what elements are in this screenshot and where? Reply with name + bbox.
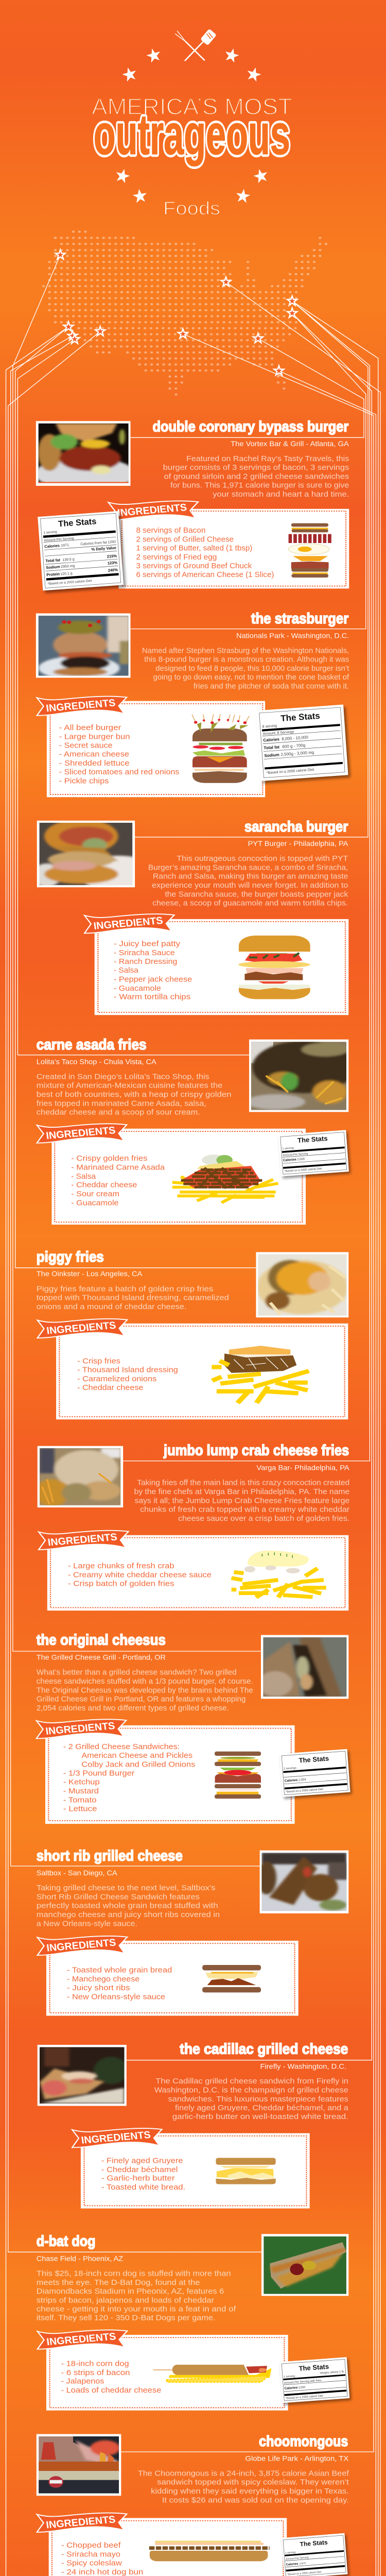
nutrition stats card: Calories (284, 1778, 298, 1783)
description: The Choomongous is a 24-inch, 3,875 calorie Asian Beef (138, 2469, 349, 2478)
description: your stomach and heart a hard time. (213, 490, 349, 499)
panel: ingredients: - Warm tortilla chips (114, 993, 190, 1001)
nutrition stats card: *Based on a 2000 calorie Diet (286, 2395, 323, 2400)
panel: ingredients: - Shredded lettuce (59, 759, 130, 767)
description: for buns. This 1,971 calorie burger is sure to give (170, 481, 349, 489)
description: It costs $26 and was sold out on the opening day. (162, 2496, 349, 2504)
nutrition stats card: 139.5 g (62, 557, 75, 562)
panel: ingredients: - Large burger bun (59, 732, 130, 741)
banner: ingredients: INGREDIENTS (46, 1319, 117, 1336)
panel: ingredients: - Toasted white bread. (101, 2183, 185, 2192)
description: sandwiches. This luxurious masterpiece features (168, 2095, 348, 2103)
description: Ranch and Salsa, making this burger an amazing taste (153, 872, 348, 880)
description (163, 454, 349, 499)
panel: ingredients: - Ketchup (63, 1778, 100, 1786)
illustration: layered burger (289, 523, 332, 578)
panel: ingredients: - Sriracha Sauce (114, 948, 175, 957)
venue: Lolita’s Taco Shop - Chula Vista, CA (37, 1058, 156, 1066)
panel: ingredients (119, 509, 349, 588)
panel: ingredients: - 1/3 Pound Burger (63, 1769, 135, 1777)
dotted map of the United States (44, 232, 326, 395)
description (142, 646, 349, 690)
description: the Sarancha sauce, the burger boasts pepper jack (165, 890, 348, 899)
banner: ingredients: INGREDIENTS (117, 502, 187, 518)
illustration: choomongous sandwich (149, 2540, 270, 2561)
description: garlic-herb butter on well-toasted white bread. (172, 2112, 348, 2121)
icon: crossed fork and spatula (175, 29, 216, 60)
nutrition stats card: Calories (44, 543, 60, 549)
panel: ingredients: - Lettuce (63, 1804, 97, 1813)
venue: Firefly - Washington, D.C. (260, 2063, 346, 2071)
title: outrageous (94, 103, 290, 166)
description: cheese - getting it into your mouth is a feat in and of (37, 2305, 236, 2313)
description: What’s better than a grilled cheese sandwich? Two grilled (37, 1668, 237, 1676)
nutrition stats card (279, 1749, 352, 1799)
panel: ingredients (47, 1535, 348, 1611)
photo: the cadillac grilled cheese (38, 2045, 128, 2106)
panel: ingredients: - Guacamole (71, 1198, 119, 1207)
nutrition stats card: The Stats (300, 2538, 328, 2548)
banner: ingredients: INGREDIENTS (45, 1124, 116, 1141)
section: choomongous (37, 2433, 349, 2576)
description: strips of bacon, jalapenos and loads of cheddar (37, 2296, 215, 2304)
nutrition stats card: 240% (108, 567, 118, 573)
nutrition stats card: Amount Per Serving (283, 1153, 308, 1157)
description: 2,054 calories and two different types of grilled cheese. (37, 1704, 229, 1712)
illustration: strasburger (192, 714, 249, 783)
nutrition stats card: 1971 (61, 544, 69, 548)
description: This outrageous concoction is topped with PYT (177, 854, 348, 863)
nutrition stats card (279, 2357, 352, 2405)
section: piggy fries (37, 1248, 348, 1419)
panel: ingredients: - 6 strips of bacon (61, 2368, 130, 2377)
panel: ingredients: - Sliced tomatoes and red onions (59, 768, 179, 776)
nutrition stats card: *Based on a 2000 calorie Diet (47, 579, 92, 586)
description (154, 2077, 348, 2121)
description: Washington, D.C. is the champaign of grilled cheese (154, 2086, 348, 2094)
panel: ingredients: - 2 Grilled Cheese Sandwiches: (63, 1742, 180, 1751)
description: perfectly toasted whole grain bread stuffed with (37, 1902, 218, 1910)
heading: sarancha burger (244, 819, 348, 835)
nutrition stats card: *Based on a 2000 calorie Diet (286, 1788, 324, 1793)
panel: ingredients: - Salsa (71, 1172, 96, 1180)
nutrition stats card: Calories (263, 737, 280, 743)
panel: ingredients: - Secret sauce (59, 741, 113, 750)
section: sarancha burger (32, 819, 348, 1015)
nutrition stats card: 600 g - 700g (282, 743, 306, 749)
panel: ingredients: - Large chunks of fresh crab (68, 1562, 174, 1570)
description: meets the eye. The D-Bat Dog, found at the (37, 2278, 200, 2286)
nutrition stats card: 2,054 (298, 1778, 307, 1782)
photo: sarancha burger (32, 819, 160, 891)
nutrition stats card: The Stats (58, 517, 97, 529)
panel: ingredients (95, 919, 348, 1015)
nutrition stats card: *Based on a 2000 calorie Diet (284, 1167, 322, 1173)
heading: d-bat dog (37, 2233, 96, 2249)
illustration: short rib grilled cheese (202, 1965, 261, 1992)
nutrition stats card (282, 2533, 349, 2576)
section: jumbo lump crab cheese fries (34, 1442, 350, 1611)
nutrition stats card: 8,000 - 10,000 (282, 735, 309, 741)
description (37, 1668, 253, 1712)
panel: ingredients: - Sriracha mayo (61, 2550, 120, 2558)
description (148, 854, 348, 907)
panel: ingredients: - Mustard (63, 1787, 99, 1795)
description: finely aged Gruyere, Cheddar béchamel, and a (175, 2104, 348, 2112)
panel: ingredients: - Finely aged Gruyere (101, 2156, 183, 2165)
panel: ingredients: - Creamy white cheddar cheese sauce (68, 1570, 212, 1579)
section: the original cheesus (37, 1632, 352, 1824)
panel: ingredients: - Tomato (63, 1795, 96, 1804)
nutrition stats card: 2950 mg (61, 564, 75, 569)
venue: PYT Burger - Philadelphia, PA (248, 840, 348, 848)
nutrition stats card: The Stats (297, 1134, 328, 1144)
panel: ingredients: - Sour cream (71, 1190, 119, 1198)
description: fries topped in marinated Carne Asada, salsa, (37, 1099, 206, 1108)
photo: jumbo lump crab cheese fries (34, 1446, 123, 1507)
venue: Saltbox - San Diego, CA (37, 1870, 117, 1877)
panel: ingredients: - Marinated Carne Asada (71, 1163, 165, 1172)
panel: ingredients: - Crispy golden fries (71, 1154, 148, 1163)
nutrition stats card: The Stats (299, 1754, 329, 1765)
nutrition stats card (38, 511, 126, 593)
panel: ingredients: - Salsa (114, 966, 138, 975)
nutrition stats card: Calories (284, 2386, 298, 2391)
nutrition stats card: 8 serving (262, 724, 277, 729)
header: title block (92, 29, 292, 218)
panel: ingredients: - New Orleans-style sauce (67, 1992, 165, 2001)
description (134, 1479, 350, 1522)
panel: ingredients: - Pepper jack cheese (114, 975, 192, 984)
photo: d-bat dog (261, 2234, 348, 2296)
banner: ingredients: INGREDIENTS (46, 1937, 117, 1954)
panel: ingredients: 1 serving of Butter, salted (1 tbsp) (136, 544, 252, 552)
description (37, 1284, 229, 1311)
heading: choomongous (259, 2433, 348, 2449)
banner: ingredients: INGREDIENTS (45, 697, 116, 714)
description: fries and the pitcher of soda that come with it. (194, 682, 349, 690)
nutrition stats card: 2,500g - 3,000 mg (280, 750, 314, 757)
nutrition stats card: Sodium (264, 752, 279, 758)
description: Featured on Rachel Ray’s Tasty Travels, this (186, 454, 349, 463)
venue: The Oinkster - Los Angeles, CA (37, 1270, 143, 1278)
illustration: cadillac grilled cheese (216, 2158, 276, 2184)
nutrition stats card: Amount Per Serving (286, 2556, 309, 2561)
map location stars (56, 250, 297, 375)
illustration: d-bat corn dog (153, 2365, 272, 2382)
photo: the original cheesus (258, 1635, 348, 1699)
title: America's Most: AMERICA’S MOST (92, 94, 292, 120)
section: the strasburger (36, 611, 350, 797)
nutrition stats card: 120.1 g (60, 572, 73, 576)
nutrition stats card: Calories (286, 2563, 299, 2567)
description: says it all; the Jumbo Lump Crab Cheese Fries feature large (135, 1496, 349, 1505)
section: short rib grilled cheese (37, 1848, 348, 2016)
nutrition stats card: Amount: 8 Servings (262, 730, 294, 736)
nutrition stats card: 215% (107, 553, 117, 559)
section: double coronary bypass burger (34, 418, 349, 593)
nutrition stats card: The Stats (299, 2363, 329, 2372)
panel: ingredients: - Cheddar béchamel (101, 2165, 178, 2174)
description: topped with Thousand Island dressing, caramelized (37, 1294, 229, 1302)
nutrition stats card: Total fat (264, 744, 280, 751)
panel: ingredients: - Toasted whole grain bread (67, 1966, 172, 1974)
heading: the strasburger (251, 611, 349, 626)
panel: ingredients: - American cheese (59, 750, 129, 758)
banner: ingredients: INGREDIENTS (45, 2514, 116, 2531)
panel: ingredients: - Juicy short ribs (67, 1984, 130, 1992)
photo: piggy fries (256, 1252, 348, 1317)
panel: ingredients (49, 2518, 287, 2576)
description: cheese sandwiches stuffed with a 1/3 pound burger, of course. (37, 1677, 253, 1685)
description: experience your mouth will never forget. In addition to (152, 881, 348, 889)
panel: ingredients (46, 1941, 299, 2016)
decorative stars around the title (114, 46, 269, 204)
venue: Nationals Park - Washington, D.C. (236, 632, 349, 640)
photo: double coronary bypass burger (34, 421, 136, 490)
panel: ingredients (51, 1129, 306, 1225)
description (37, 1884, 220, 1928)
panel: ingredients: - All beef burger (59, 723, 121, 732)
nutrition stats card: Protein (46, 571, 60, 577)
panel: ingredients: - Caramelized onions (77, 1375, 156, 1383)
panel: ingredients: 3 servings of Ground Beef Chuck (136, 562, 252, 570)
heading: carne asada fries (37, 1037, 147, 1053)
panel: ingredients: 8 servings of Bacon (136, 526, 205, 535)
panel: ingredients: - Chopped beef (61, 2541, 121, 2550)
nutrition stats card (256, 704, 350, 784)
description: of ground sirloin and 2 grilled cheese sandwiches (164, 472, 349, 481)
panel: ingredients: - Thousand Island dressing (77, 1366, 178, 1374)
panel: ingredients: - Guacamole (114, 984, 161, 992)
photo: carne asada fries (246, 1040, 356, 1112)
description: Short Rib Grilled Cheese Sandwich features (37, 1892, 200, 1901)
panel: ingredients: - Jalapenos (61, 2377, 104, 2385)
description (37, 1072, 232, 1116)
panel: ingredients: - Manchego cheese (67, 1975, 139, 1983)
panel: ingredients: Colby Jack and Grilled Onions (81, 1760, 195, 1769)
panel: ingredients: - Ranch Dressing (114, 957, 177, 966)
description: Piggy fries feature a batch of golden crisp fries (37, 1284, 213, 1293)
illustration: sarancha burger (238, 936, 310, 999)
description: itself. They sell 120 - 350 D-Bat Dogs per game. (37, 2314, 216, 2322)
panel: ingredients: - Garlic-herb butter (101, 2174, 175, 2182)
description: cheddar cheese and a scoop of sour cream. (37, 1108, 200, 1116)
description: Burger’s amazing Sarancha sauce, a combo of Sriracha, (148, 863, 348, 872)
description: The Cadillac grilled cheese sandwich from Firefly in (155, 2077, 348, 2086)
nutrition stats card: The Stats (280, 711, 320, 723)
nutrition stats card: 123% (107, 560, 118, 566)
heading: short rib grilled cheese (37, 1848, 183, 1864)
description: a New Orleans-style sauce. (37, 1919, 137, 1928)
heading: piggy fries (37, 1248, 104, 1265)
description: sandwich topped with spicy coleslaw. They weren’t (157, 2478, 349, 2486)
panel: ingredients: 2 servings of Fried egg (136, 553, 217, 561)
panel: ingredients: - 24 inch hot dog bun (61, 2568, 143, 2576)
description: Grilled Cheese Grill in Portland, OR and features a whopping (37, 1694, 245, 1703)
nutrition stats card: Total fat (45, 557, 61, 563)
heading: the original cheesus (37, 1632, 166, 1648)
venue: Globe Life Park - Arlington, TX (245, 2455, 348, 2463)
description: Diamondbacks Stadium in Pheonix, AZ, features 6 (37, 2287, 224, 2296)
nutrition stats card: Sodium (46, 564, 60, 570)
venue: Varga Bar- Philadelphia, PA (256, 1464, 349, 1472)
description: cheese sauce over a crisp batch of golden fries. (178, 1514, 349, 1522)
description: This $25, 18-inch corn dog is stuffed with more than (37, 2269, 231, 2278)
description: burger consists of 3 servings of bacon, 3 servings (163, 463, 349, 472)
photo: short rib grilled cheese (257, 1851, 348, 1913)
description: chunks of fresh crab topped with a creamy white cheddar (140, 1505, 350, 1514)
panel: ingredients: - Cheddar cheese (71, 1181, 137, 1189)
banner: ingredients: INGREDIENTS (93, 914, 164, 931)
nutrition stats card (278, 1130, 350, 1178)
nutrition stats card: 1 serving (285, 2551, 296, 2555)
panel: ingredients (81, 2133, 310, 2209)
description: onions and a mound of cheddar cheese. (37, 1302, 187, 1311)
description: Created in San Diego’s Lolita’s Taco Shop, this (37, 1072, 209, 1081)
nutrition stats card: 3,875 (299, 2562, 306, 2566)
section: d-bat dog (37, 2233, 352, 2411)
nutrition stats card: Amount Per Serving (44, 537, 74, 543)
description: mixture of American-Mexican cuisine features the (37, 1081, 222, 1090)
banner: ingredients: INGREDIENTS (80, 2129, 151, 2146)
description: Taking grilled cheese to the next level, Saltbox’s (37, 1884, 216, 1892)
banner: ingredients: INGREDIENTS (47, 1531, 118, 1548)
nutrition stats card: % Daily Value (91, 545, 116, 552)
description (37, 2269, 236, 2322)
description: The Original Cheesus was developed by the brains behind The (37, 1686, 253, 1694)
panel: ingredients: - Crisp fries (77, 1357, 120, 1365)
banner: ingredients: INGREDIENTS (46, 2331, 117, 2348)
venue: Chase Field - Phoenix, AZ (37, 2255, 123, 2263)
panel: ingredients (47, 701, 265, 797)
description: by the fine chefs at Varga Bar in Philadelphia, PA. The name (134, 1487, 349, 1496)
venue: The Grilled Cheese Grill - Portland, OR (37, 1654, 166, 1662)
nutrition stats card: 1 serving (284, 2375, 295, 2379)
nutrition stats card: Weighs almost 1 lb. (320, 2370, 345, 2375)
illustration: piggy fries (212, 1346, 309, 1403)
section: the cadillac grilled cheese (38, 2041, 348, 2209)
panel: ingredients: - Crisp batch of golden fries (68, 1580, 174, 1588)
nutrition stats card: *Based on a 2000 calorie Diet (267, 768, 314, 775)
panel: ingredients: - Loads of cheddar cheese (61, 2386, 161, 2395)
panel: ingredients: American Cheese and Pickles (81, 1751, 192, 1760)
panel: ingredients: - Juicy beef patty (114, 939, 181, 948)
description: manchego cheese and juicy short ribs covered in (37, 1910, 220, 1919)
description: best of both countries, with a heap of crispy golden (37, 1090, 232, 1098)
nutrition stats card: 2 servings (284, 1767, 296, 1771)
description (138, 2469, 349, 2504)
description: kidding when they said everything is bigger in Texas. (151, 2487, 349, 2496)
photo: the strasburger (36, 614, 130, 680)
title: Foods: Foods (163, 198, 220, 218)
panel: ingredients (46, 2335, 288, 2411)
nutrition stats card: 1 serving (43, 530, 57, 535)
section: carne asada fries (37, 1037, 356, 1225)
panel: ingredients: - Pickle chips (59, 776, 109, 785)
description: cheese, a scoop of guacamole and warm tortilla chips. (152, 899, 348, 907)
nutrition stats card: 1 serving (282, 1147, 294, 1150)
illustration: carne asada fries (172, 1155, 278, 1202)
panel: ingredients (56, 1324, 348, 1419)
nutrition stats card: Calories (283, 1158, 296, 1162)
panel: ingredients (45, 1725, 295, 1824)
nutrition stats card: Calories from fat 1260 (80, 540, 116, 546)
venue: The Vortex Bar & Grill - Atlanta, GA (231, 440, 349, 448)
nutrition stats card: 3,000 (298, 2386, 306, 2389)
panel: ingredients: 6 servings of American Cheese (1 Slice) (136, 570, 274, 579)
panel: ingredients: 2 servings of Grilled Cheese (136, 535, 234, 544)
panel: ingredients: - Cheddar cheese (77, 1383, 143, 1392)
banner: ingredients: INGREDIENTS (45, 1720, 116, 1737)
panel: ingredients: - Spicy coleslaw (61, 2559, 122, 2567)
illustration: the original cheesus (215, 1752, 261, 1799)
nutrition stats card: 2,000 (297, 1158, 305, 1161)
nutrition stats card: Amount Per Serving with fries (284, 2379, 322, 2385)
illustration: jumbo lump crab fries (232, 1550, 326, 1598)
panel: ingredients: - 18-inch corn dog (61, 2359, 129, 2368)
photo: choomongous (37, 2434, 121, 2496)
